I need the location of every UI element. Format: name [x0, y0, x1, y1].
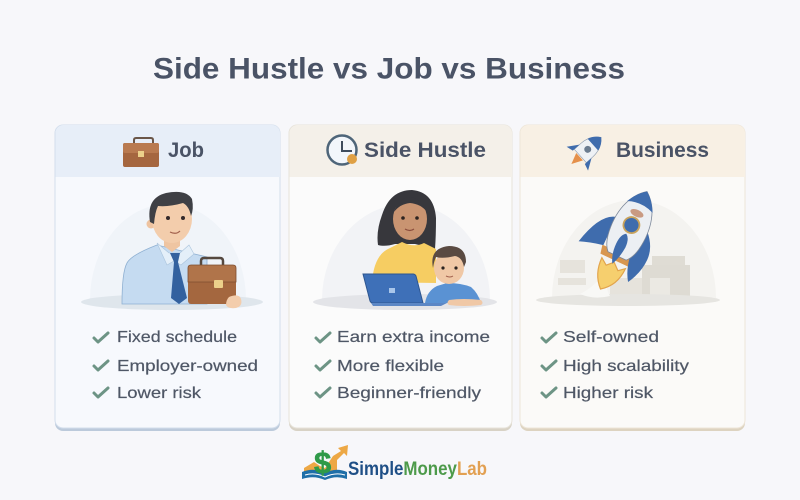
side hustle header: Side Hustle	[364, 138, 486, 162]
job header	[56, 125, 280, 177]
flame	[590, 257, 626, 295]
briefcase	[188, 258, 236, 304]
job header: Job	[168, 138, 204, 162]
side hustle benefits list: More flexible	[337, 358, 444, 375]
logo wordmark: SimpleMoneyLab	[348, 458, 487, 480]
fins	[579, 207, 616, 251]
job benefits list: Fixed schedule	[117, 329, 237, 346]
job benefits list: Employer-owned	[117, 358, 258, 375]
job benefits list: Lower risk	[117, 385, 202, 402]
buildings	[558, 256, 690, 296]
panel: business	[520, 125, 745, 431]
illustration: man with briefcase	[81, 192, 263, 310]
side hustle benefits list: Earn extra income	[337, 329, 490, 346]
business benefits list	[542, 329, 689, 402]
side hustle benefits list: Beginner-friendly	[337, 385, 481, 402]
business benefits list: High scalability	[563, 358, 689, 375]
child	[425, 246, 482, 306]
laptop	[363, 274, 447, 306]
logo: SimpleMoneyLab	[302, 445, 487, 480]
side hustle benefits list	[316, 329, 490, 402]
body	[601, 184, 664, 264]
business header	[520, 125, 745, 177]
business header: Business	[616, 138, 709, 162]
panel: side hustle	[289, 125, 512, 431]
business benefits list: Self-owned	[563, 329, 659, 346]
illustration: parent and child with laptop	[313, 190, 497, 310]
icon: briefcase	[123, 138, 159, 167]
business benefits list: Higher risk	[563, 385, 654, 402]
rocket	[564, 174, 673, 302]
illustration: rocket over buildings	[536, 174, 720, 306]
job benefits list	[94, 329, 258, 402]
logo icon: book, dollar and arrow: $	[314, 445, 331, 480]
icon: clock	[328, 136, 357, 164]
panel: job	[55, 125, 280, 431]
logo icon: book, dollar and arrow	[302, 445, 348, 480]
title: Side Hustle vs Job vs Business	[153, 52, 625, 86]
side hustle header	[290, 125, 512, 177]
icon: small rocket	[561, 125, 612, 176]
